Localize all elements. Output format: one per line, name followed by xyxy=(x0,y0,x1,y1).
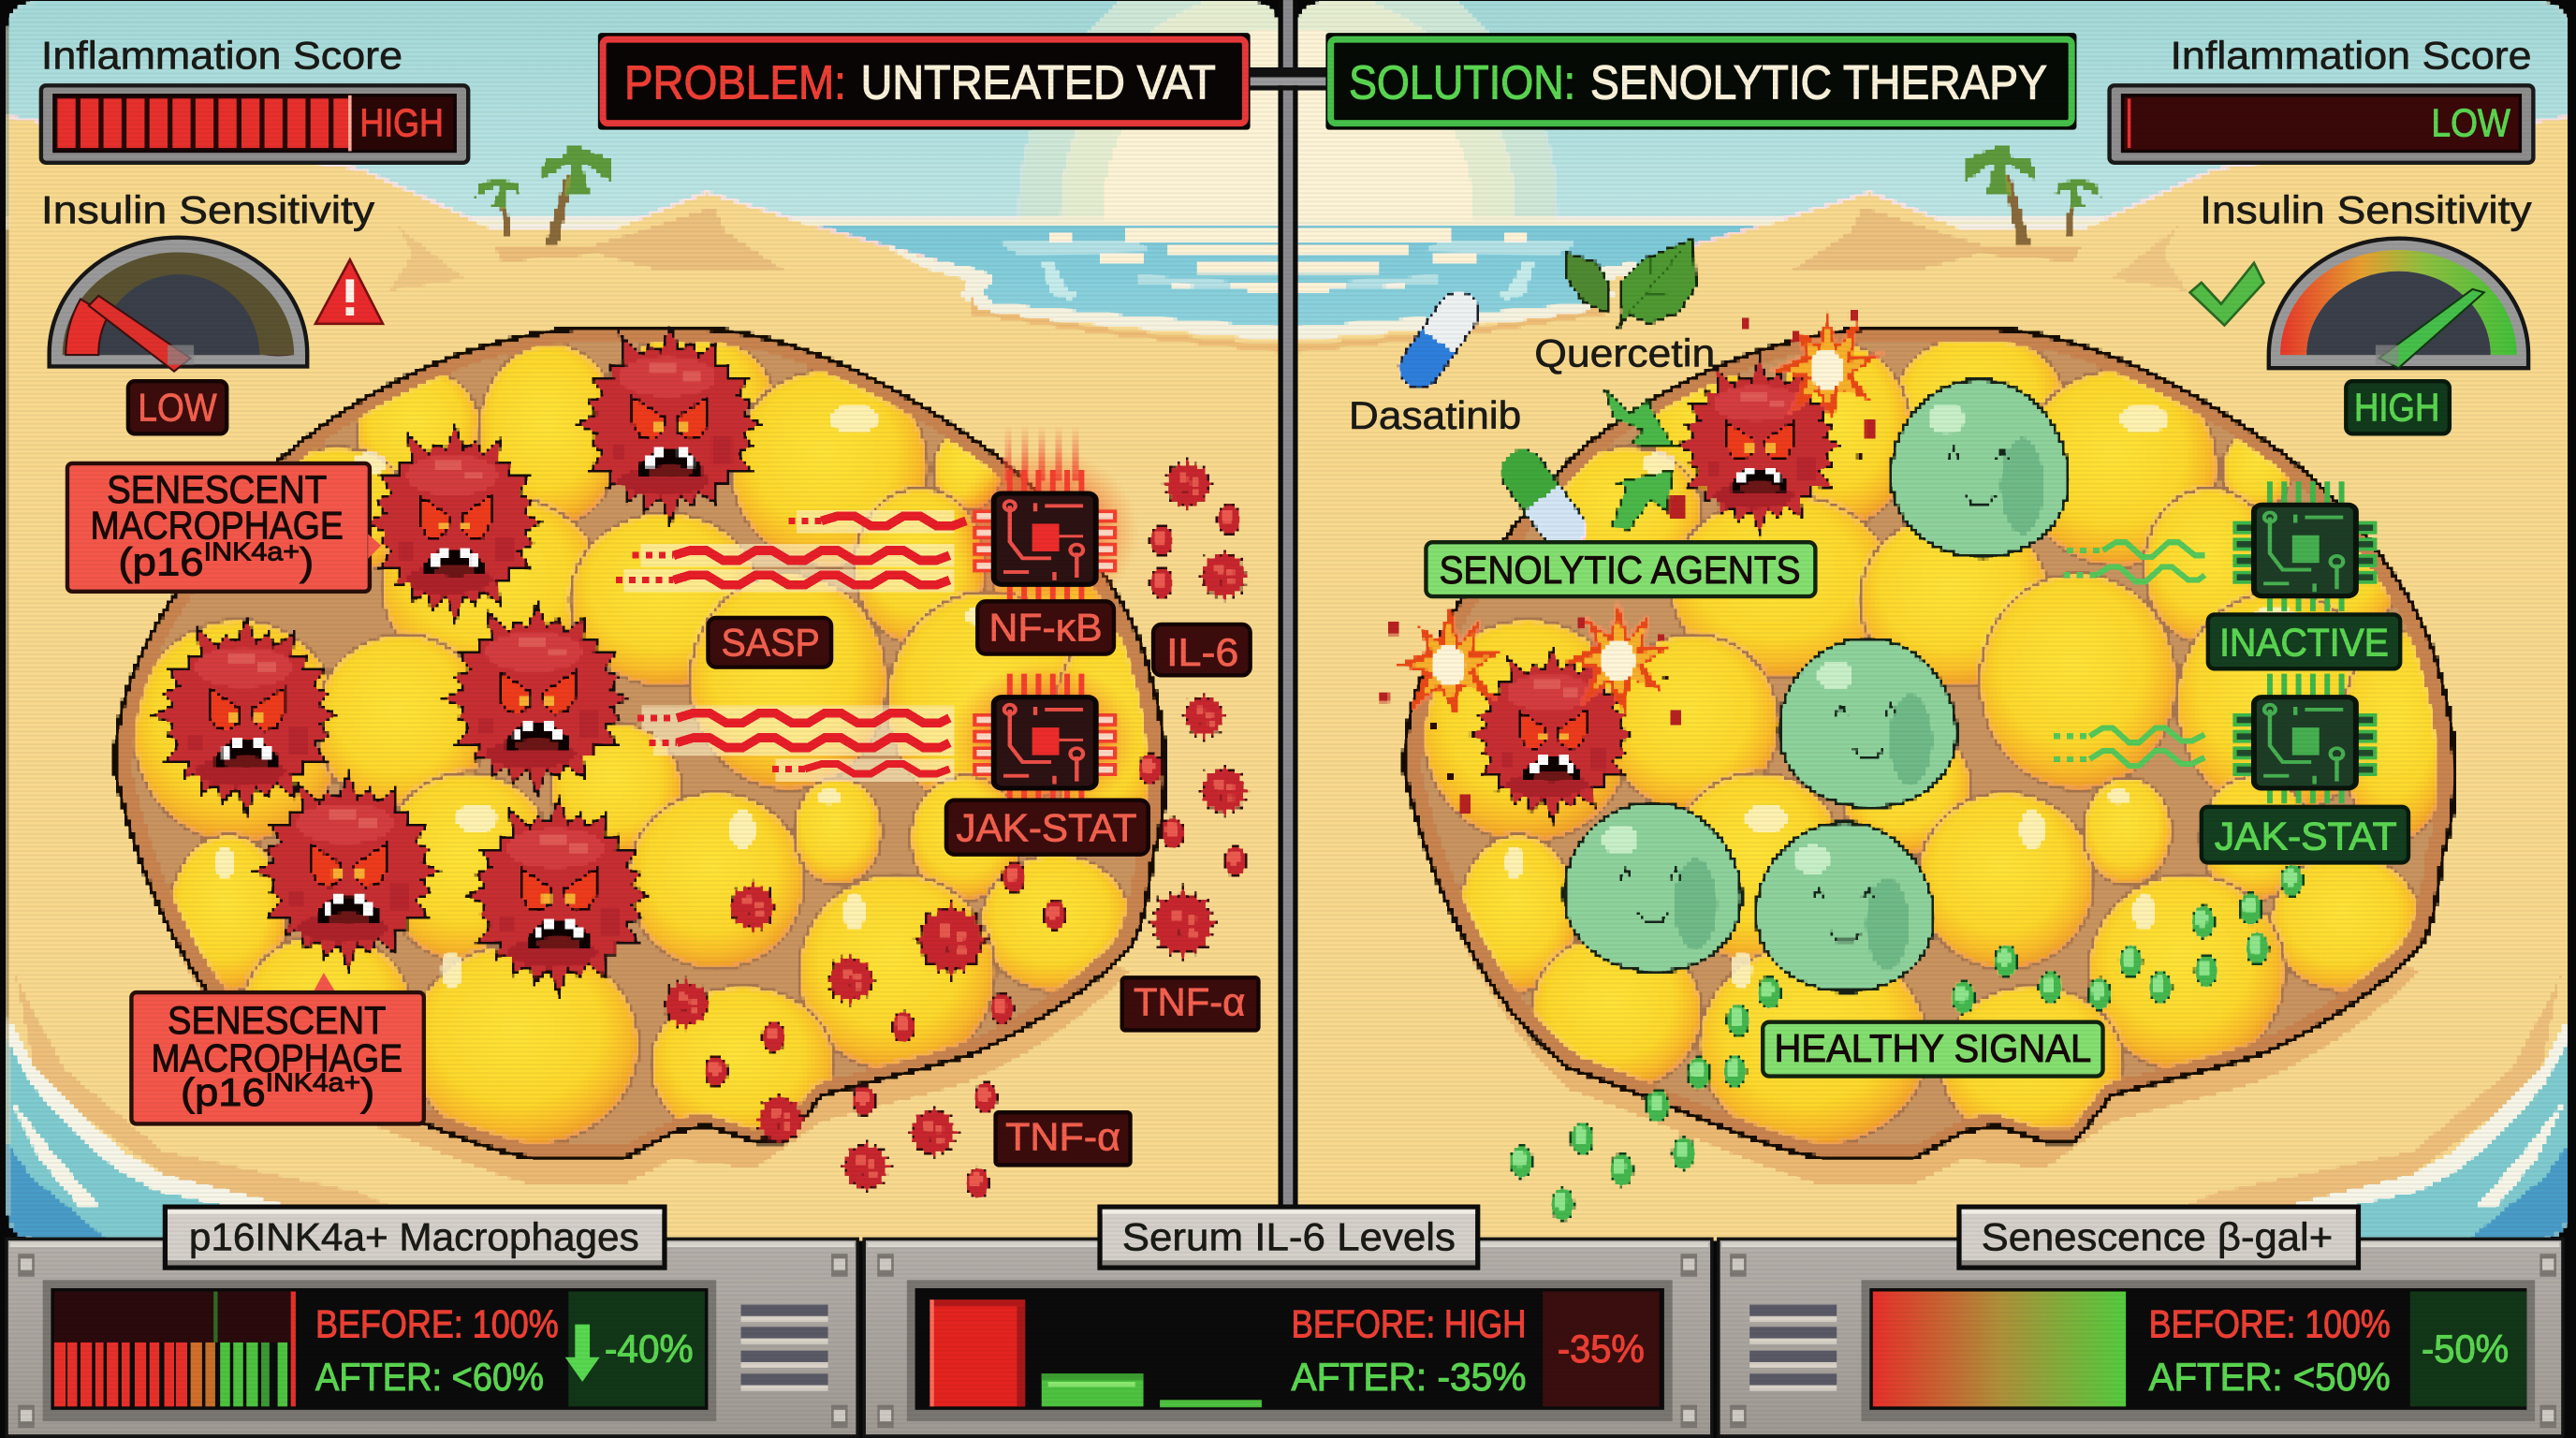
callout: senescent macrophage lower: MACROPHAGE xyxy=(151,1035,402,1079)
icon: dying macrophage upper xyxy=(1676,359,1840,535)
icon: down arrow xyxy=(565,1325,600,1382)
callout: senescent macrophage lower: (p16 xyxy=(181,1070,259,1114)
callout: senescent macrophage upper: INK4a+ xyxy=(204,536,300,565)
gauge: right inflammation score: LOW xyxy=(2432,101,2510,145)
callout: senescent macrophage lower xyxy=(131,973,424,1123)
title: solution header: SENOLYTIC THERAPY xyxy=(1590,55,2047,109)
title: solution header xyxy=(1325,33,2076,130)
label: tnf-alpha upper xyxy=(1122,977,1258,1030)
panel: right beach background xyxy=(1297,1,2568,1241)
panel: p16 macrophages metric: BEFORE: 100% xyxy=(315,1302,559,1346)
label: jak-stat right: JAK-STAT xyxy=(2215,814,2397,858)
icon: green check mark xyxy=(2190,263,2264,326)
gauge: right inflammation score xyxy=(2110,34,2533,163)
icon: left chip glow nf-kb xyxy=(949,424,1140,618)
label: senolytic agents: SENOLYTIC AGENTS xyxy=(1439,548,1801,592)
gauge: left insulin sensitivity: Insulin Sensitivity xyxy=(41,188,374,232)
gauge: left insulin sensitivity xyxy=(41,188,374,372)
label: sasp: SASP xyxy=(721,620,820,664)
icon: senescent macrophage group xyxy=(153,326,761,996)
gauge: right insulin sensitivity: Insulin Sensitivity xyxy=(2200,188,2532,232)
icon: green arrow lower xyxy=(1612,470,1674,529)
label: tnf-alpha lower: TNF-α xyxy=(1005,1115,1120,1159)
panel: p16 tab: p16INK4a+ Macrophages xyxy=(189,1215,639,1259)
gauge: left inflammation score: HIGH xyxy=(359,101,444,145)
title: problem header: UNTREATED VAT xyxy=(861,55,1216,109)
callout: senescent macrophage upper: MACROPHAGE xyxy=(91,504,344,548)
panel: serum il-6 metric: AFTER: -35% xyxy=(1292,1355,1526,1399)
callout: senescent macrophage upper: ) xyxy=(300,539,314,583)
label: jak-stat left: JAK-STAT xyxy=(956,806,1137,850)
title: problem header: PROBLEM: xyxy=(624,55,846,109)
callout: senescent macrophage lower: SENESCENT xyxy=(168,998,386,1042)
label: high: HIGH xyxy=(2354,385,2439,429)
icon: green arrow upper xyxy=(1603,388,1674,447)
center divider xyxy=(1245,0,1331,1242)
callout: senescent macrophage lower: INK4a+ xyxy=(266,1067,360,1096)
panel: p16 macrophages metric: AFTER: <60% xyxy=(315,1355,544,1399)
label: jak-stat right xyxy=(2202,807,2408,862)
panel: senescence metric: BEFORE: 100% xyxy=(2149,1302,2391,1346)
panel: p16 macrophages metric xyxy=(7,1239,857,1436)
label: low: LOW xyxy=(138,385,217,429)
panel: p16 macrophages metric: -40% xyxy=(605,1327,694,1371)
panel: beta-gal tab xyxy=(1956,1204,2361,1270)
icon: red signal waves upper xyxy=(616,516,966,585)
panel: il-6 tab xyxy=(1097,1204,1480,1270)
bar chart: bars xyxy=(54,1292,296,1406)
callout: senescent macrophage upper: SENESCENT xyxy=(107,467,327,511)
chip: jak-stat inactive xyxy=(2235,674,2375,803)
chart: left adipose tissue cells xyxy=(98,312,1183,1167)
label: il-6: IL-6 xyxy=(1166,630,1238,674)
tissue shadow: right xyxy=(1408,788,2423,1186)
label: nf-kb: NF-κB xyxy=(989,605,1103,649)
gauge: right insulin sensitivity xyxy=(2200,188,2532,368)
panel: serum il-6 metric: -35% xyxy=(1558,1327,1645,1371)
panel: left beach background xyxy=(6,1,1279,1241)
callout: senescent macrophage lower: ) xyxy=(360,1070,374,1114)
title: problem header xyxy=(598,33,1251,130)
panel: senescence metric xyxy=(1719,1239,2563,1436)
icon: green signal waves xyxy=(2054,542,2204,766)
panel: senescence metric: -50% xyxy=(2422,1327,2509,1371)
gauge: left inflammation score: Inflammation Score xyxy=(41,34,402,78)
panel: il-6 tab: Serum IL-6 Levels xyxy=(1122,1215,1456,1259)
panel: serum il-6 metric: BEFORE: HIGH xyxy=(1292,1302,1526,1346)
icon: cytokine particles xyxy=(661,457,1251,1198)
label: inactive: INACTIVE xyxy=(2219,620,2389,664)
icon: red signal waves lower xyxy=(637,713,949,774)
icon: senolytic capsule xyxy=(1489,438,1596,561)
callout: senescent macrophage upper: (p16 xyxy=(118,539,198,583)
chart: right adipose tissue cells xyxy=(1388,312,2472,1167)
chip: nf-kb active xyxy=(974,470,1115,600)
label: dasatinib: Dasatinib xyxy=(1349,393,1521,437)
icon: dasatinib capsule xyxy=(1388,281,1490,399)
label: healthy signal: HEALTHY SIGNAL xyxy=(1775,1026,2091,1070)
icon: healthy signal particles xyxy=(1510,864,2304,1221)
title: solution header: SOLUTION: xyxy=(1349,55,1575,109)
icon: dying macrophage lower xyxy=(1469,648,1633,824)
tissue shadow: left xyxy=(118,788,1134,1186)
label: tnf-alpha lower xyxy=(996,1112,1131,1165)
panel: senescence metric: AFTER: <50% xyxy=(2149,1355,2391,1399)
icon: pale signal glow xyxy=(624,521,953,769)
callout: senescent macrophage upper xyxy=(67,463,381,592)
bar: gradient meter xyxy=(1873,1292,2126,1406)
icon: quercetin leaves xyxy=(1567,238,1695,330)
icon: left chip glow jak-stat xyxy=(949,661,1140,818)
chip: jak-stat active xyxy=(974,674,1115,803)
label: il-6 xyxy=(1153,624,1251,675)
icon: warning triangle xyxy=(315,259,383,324)
bar chart: levels xyxy=(929,1299,1262,1407)
panel: serum il-6 metric xyxy=(864,1239,1712,1436)
gauge: left inflammation score xyxy=(41,34,468,163)
icon: explosions xyxy=(1377,308,1885,815)
bar: red segments xyxy=(57,95,352,151)
chip: nf-kb inactive xyxy=(2235,481,2375,611)
gauge: right inflammation score: Inflammation Score xyxy=(2170,34,2532,78)
panel: beta-gal tab: Senescence β-gal+ xyxy=(1982,1215,2333,1259)
label: nf-kb xyxy=(977,601,1114,654)
label: tnf-alpha upper: TNF-α xyxy=(1134,980,1245,1024)
panel: p16 tab xyxy=(163,1204,667,1270)
icon: healthy macrophages xyxy=(1564,379,2069,991)
label: quercetin: Quercetin xyxy=(1534,330,1715,374)
